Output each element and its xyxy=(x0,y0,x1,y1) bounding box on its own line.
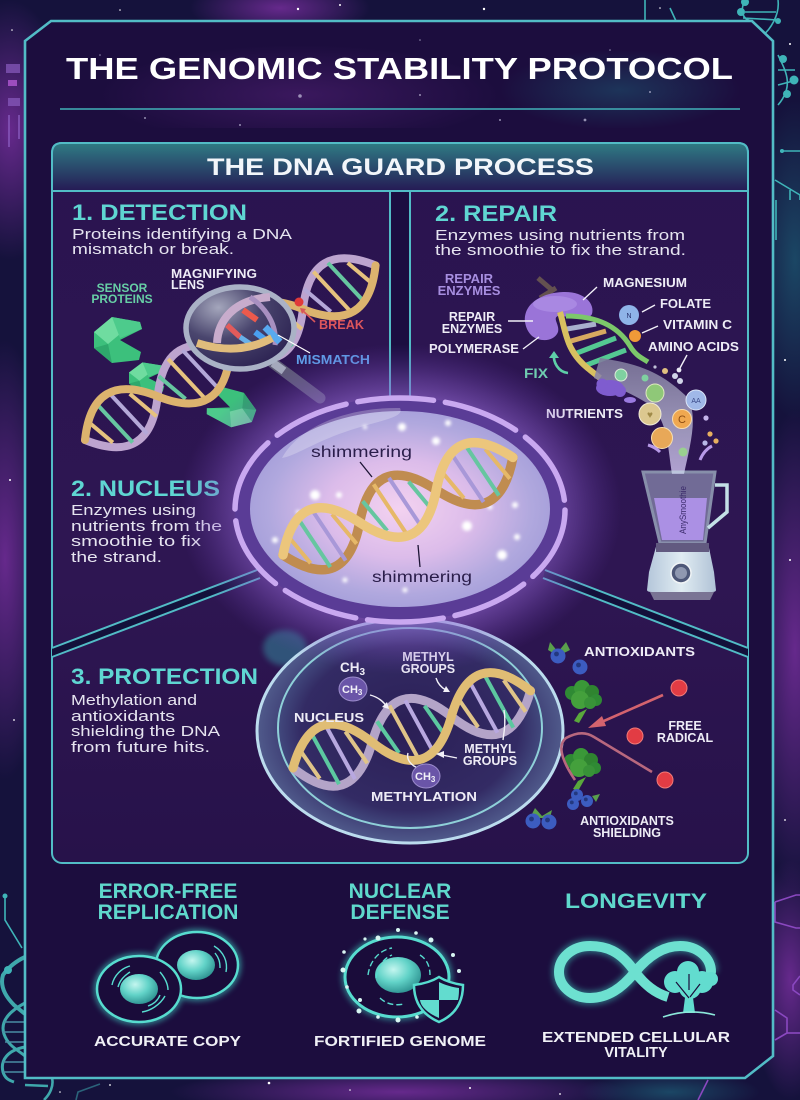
label: shimmering top: shimmering xyxy=(311,444,412,461)
sparkles xyxy=(272,420,520,592)
label: methylation: METHYLATION xyxy=(371,790,477,804)
icon: blender xyxy=(643,472,727,600)
heading: REPLICATION xyxy=(98,901,238,924)
label: repair enzymes purple: ENZYMES xyxy=(438,283,501,298)
label: vitamin c: VITAMIN C xyxy=(663,318,732,332)
label: repair enzymes purple: REPAIR xyxy=(445,271,494,286)
label: antioxidants shielding: SHIELDING xyxy=(593,826,661,840)
text: detection description: Proteins identifying a DNA xyxy=(72,226,292,243)
label: magnesium: MAGNESIUM xyxy=(603,276,687,290)
label: methyl groups right: GROUPS xyxy=(463,754,517,768)
text: nucleus description: smoothie to fix xyxy=(71,533,202,550)
decoration: left circuit blocks xyxy=(6,64,20,147)
title: THE GENOMIC STABILITY PROTOCOL xyxy=(66,51,733,86)
icon: sensor protein lower xyxy=(204,383,260,433)
label: CH3 top: CH xyxy=(340,660,360,675)
label: folate xyxy=(619,297,711,325)
icon: sensor protein small xyxy=(129,362,165,394)
label: free radical xyxy=(657,719,713,745)
DNA helix: protection xyxy=(283,661,540,798)
arrow: methyl top xyxy=(436,678,450,692)
icon: broccoli top xyxy=(565,680,602,723)
panel: 1. detection xyxy=(71,200,390,464)
protection bubble xyxy=(257,619,563,843)
benefit: error-free replication xyxy=(94,880,241,1050)
icon: infinity and tree xyxy=(559,946,718,1017)
text: repair description: Enzymes using nutrients from xyxy=(435,227,685,244)
icon: CH3 molecule top: CH xyxy=(342,684,358,696)
heading xyxy=(98,880,238,924)
label: folate: N xyxy=(626,313,632,320)
nutrient particles: C xyxy=(678,414,686,426)
arrow: CH3 to helix xyxy=(370,695,389,709)
label: sensor proteins xyxy=(91,281,153,306)
marker: break xyxy=(294,298,315,322)
text: nucleus description: nutrients from the xyxy=(71,518,222,535)
heading: repair: 2. REPAIR xyxy=(435,201,557,226)
orb glow xyxy=(178,344,622,674)
label: methyl groups right: METHYL xyxy=(464,742,516,756)
deflected radical path xyxy=(561,733,652,780)
icon: CH3 molecule bottom: 3 xyxy=(431,775,436,784)
text: repair description: the smoothie to fix the strand. xyxy=(435,242,686,259)
label: antioxidants: ANTIOXIDANTS xyxy=(584,645,695,659)
text: protection description: antioxidants xyxy=(71,708,175,725)
arrow: free radical attack xyxy=(588,695,663,728)
label: nutrients: NUTRIENTS xyxy=(546,407,623,421)
heading: NUCLEAR xyxy=(349,880,451,903)
text: repair description xyxy=(435,227,686,259)
text: detection description: mismatch or break. xyxy=(72,241,234,258)
label: magnifying lens: MAGNIFYING xyxy=(171,267,257,281)
label: CH3 top: 3 xyxy=(360,667,366,678)
header band xyxy=(52,143,748,191)
icon: CH3 molecule bottom: CH xyxy=(415,771,431,783)
label: antioxidants shielding: ANTIOXIDANTS xyxy=(580,814,674,828)
heading: detection: 1. DETECTION xyxy=(72,200,247,225)
antioxidants and free radicals xyxy=(526,642,713,840)
decoration: bottom left DNA xyxy=(2,894,100,1100)
text: detection description xyxy=(72,226,292,258)
label: polymerase: POLYMERASE xyxy=(429,342,519,356)
text: protection description: Methylation and xyxy=(71,692,197,709)
icon: shielded cell xyxy=(340,928,463,1022)
label: methyl groups right xyxy=(463,742,517,768)
icon: CH3 molecule bottom xyxy=(408,753,440,788)
icon: free radical top xyxy=(671,680,687,696)
icon: blueberries bottom xyxy=(526,808,556,830)
nutrient particles: AA xyxy=(691,398,701,405)
label: sensor proteins: SENSOR xyxy=(97,281,148,295)
highlight xyxy=(282,408,401,458)
label: fix xyxy=(524,351,568,381)
text: protection description xyxy=(71,692,220,756)
label: repair enzymes white: REPAIR xyxy=(449,310,495,324)
text: protection description: from future hits. xyxy=(71,739,210,756)
icon: free radical bottom xyxy=(657,772,673,788)
label: repair enzymes white: ENZYMES xyxy=(442,322,502,336)
label: shimmering bottom: shimmering xyxy=(372,569,472,586)
decoration: bottom right hexagons xyxy=(698,895,800,1100)
title divider xyxy=(60,108,740,110)
label: free radical: RADICAL xyxy=(657,731,713,745)
label: shimmering bottom xyxy=(372,545,472,586)
smoothie stream xyxy=(594,358,693,474)
label: repair enzymes white xyxy=(442,310,533,336)
benefit: longevity xyxy=(542,890,731,1061)
icon: free radical middle xyxy=(627,728,643,744)
label: fix: FIX xyxy=(524,365,549,381)
label: methyl groups top xyxy=(401,650,455,676)
icon: sensor protein large xyxy=(94,317,142,363)
panel: 3. protection text xyxy=(71,664,258,756)
label: magnifying lens xyxy=(171,267,257,292)
label: mismatch: MISMATCH xyxy=(296,353,370,367)
icon: magnifying lens xyxy=(186,287,320,398)
label: magnesium xyxy=(583,276,687,300)
nutrient particles xyxy=(615,365,719,460)
heading: LONGEVITY xyxy=(565,890,707,913)
caption: VITALITY xyxy=(604,1045,668,1061)
icon: repair enzyme xyxy=(525,278,593,340)
heading xyxy=(349,880,451,924)
icon: blueberries middle xyxy=(567,789,600,810)
icon: CH3 molecule top: 3 xyxy=(358,688,363,697)
label: sensor proteins: PROTEINS xyxy=(91,292,153,306)
nutrient particles: ♥ xyxy=(647,410,653,421)
label: shimmering top xyxy=(311,444,412,477)
label: methyl groups top: METHYL xyxy=(402,650,454,664)
DNA helix: detection xyxy=(71,241,390,464)
heading: DEFENSE xyxy=(350,901,450,924)
caption xyxy=(542,1030,731,1061)
block: 2. nucleus text xyxy=(71,476,222,566)
text: nucleus description: Enzymes using xyxy=(71,502,196,519)
label: methyl groups top: GROUPS xyxy=(401,662,455,676)
blender brand text: AnySmoothie xyxy=(678,486,689,534)
label: repair enzymes purple xyxy=(438,271,501,298)
heading: ERROR-FREE xyxy=(99,880,237,903)
label: mismatch xyxy=(278,335,370,367)
label: amino acids xyxy=(648,340,739,368)
label: polymerase xyxy=(429,337,539,356)
text: nucleus description xyxy=(71,502,222,566)
benefit: nuclear defense xyxy=(314,880,486,1050)
icon: dividing cells xyxy=(97,932,238,1022)
icon: blueberries top xyxy=(548,642,588,674)
label: folate: FOLATE xyxy=(660,297,711,311)
decoration: top right DNA xyxy=(645,0,800,240)
icon: CH3 molecule top xyxy=(339,677,367,701)
label: magnifying lens: LENS xyxy=(171,278,204,292)
text: protection description: shielding the DNA xyxy=(71,723,220,740)
label: antioxidants shielding xyxy=(580,814,674,840)
icon: repair helix xyxy=(560,312,648,378)
section heading: THE DNA GUARD PROCESS xyxy=(207,154,594,181)
label: free radical: FREE xyxy=(668,719,702,733)
icon: broccoli bottom xyxy=(564,748,601,791)
heading: protection: 3. PROTECTION xyxy=(71,664,258,689)
label: nucleus: NUCLEUS xyxy=(294,711,364,725)
DNA helix: nucleus xyxy=(271,429,525,584)
label: amino acids: AMINO ACIDS xyxy=(648,340,739,354)
label: break: BREAK xyxy=(319,318,364,332)
caption: EXTENDED CELLULAR xyxy=(542,1030,731,1046)
icon: purple enzyme lower xyxy=(596,378,636,403)
caption: FORTIFIED GENOME xyxy=(314,1034,486,1050)
heading: nucleus: 2. NUCLEUS xyxy=(71,476,220,501)
label: vitamin c xyxy=(629,318,732,342)
panel: 2. repair xyxy=(429,201,739,600)
central nucleus orb xyxy=(178,344,622,674)
panel dividers xyxy=(52,191,748,657)
caption: ACCURATE COPY xyxy=(94,1034,241,1050)
panel: the DNA guard process xyxy=(52,143,748,863)
text: nucleus description: the strand. xyxy=(71,549,162,566)
arrow: methyl right xyxy=(436,710,505,758)
